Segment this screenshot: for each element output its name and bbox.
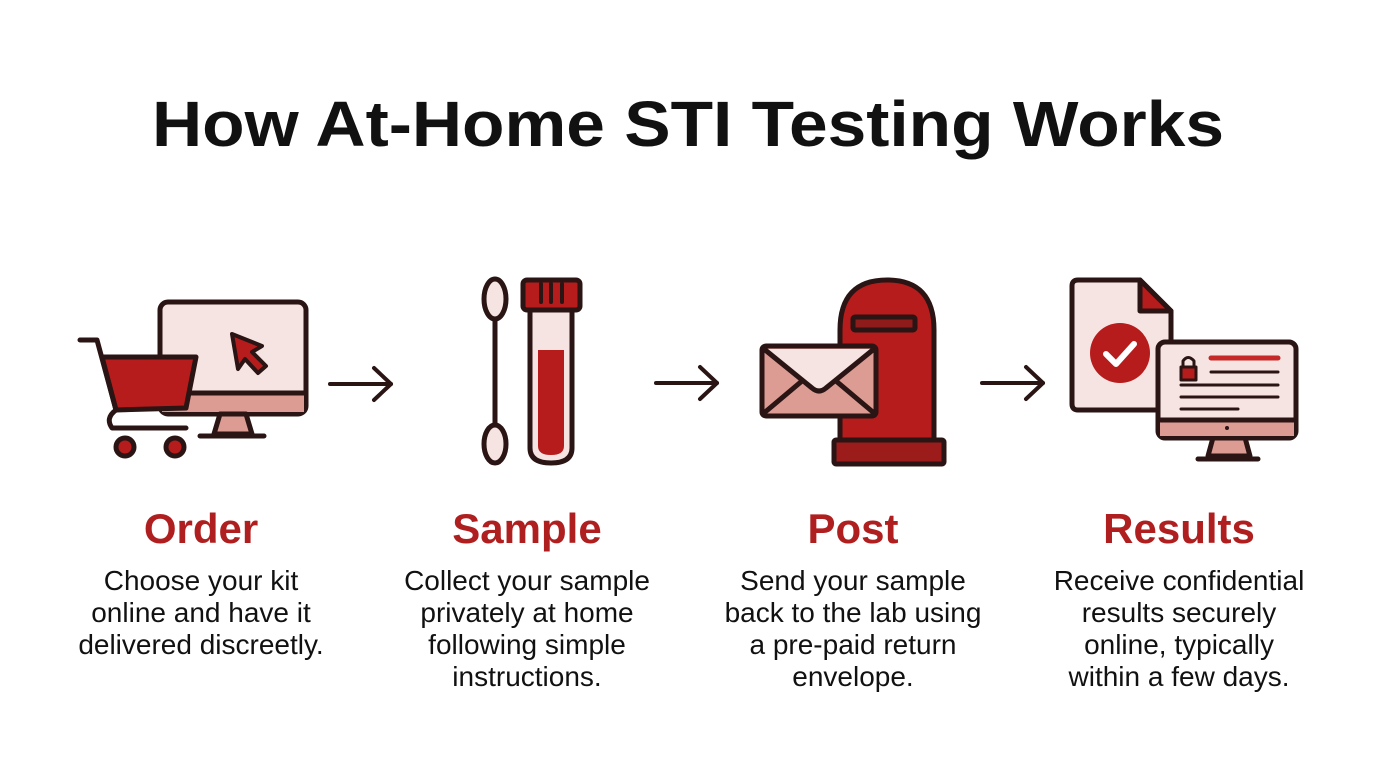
column: order text: delivered discreetly. xyxy=(78,629,324,660)
column: results text xyxy=(1054,505,1304,692)
column: sample text: privately at home xyxy=(420,597,634,628)
icon: results (document and monitor) xyxy=(1072,280,1296,459)
icon: order (monitor and cart) xyxy=(80,302,306,456)
column: results text: results securely xyxy=(1082,597,1276,628)
arrow 2 xyxy=(656,367,717,399)
column: post text xyxy=(725,505,981,692)
column: post text: a pre-paid return xyxy=(749,629,957,660)
column: order text: online and have it xyxy=(91,597,311,628)
column: post text: Post xyxy=(807,505,899,552)
column: results text: Results xyxy=(1103,505,1255,552)
column: sample text: Collect your sample xyxy=(404,565,650,596)
column: order text xyxy=(78,505,324,660)
column: order text: Choose your kit xyxy=(104,565,298,596)
arrow 1 xyxy=(330,368,391,400)
column: post text: back to the lab using xyxy=(725,597,981,628)
title: How At-Home STI Testing Works xyxy=(152,88,1224,160)
arrow 3 xyxy=(982,367,1043,399)
column: results text: online, typically xyxy=(1084,629,1274,660)
column: order text: Order xyxy=(144,505,258,552)
icon: post (postbox and envelope) xyxy=(762,280,944,464)
column: post text: Send your sample xyxy=(740,565,966,596)
column: sample text xyxy=(404,505,650,692)
column: sample text: Sample xyxy=(452,505,602,552)
column: results text: within a few days. xyxy=(1068,661,1290,692)
column: sample text: instructions. xyxy=(452,661,602,692)
column: sample text: following simple xyxy=(428,629,626,660)
icon: sample (swab and tube) xyxy=(484,279,580,463)
column: post text: envelope. xyxy=(792,661,914,692)
column: results text: Receive confidential xyxy=(1054,565,1304,596)
